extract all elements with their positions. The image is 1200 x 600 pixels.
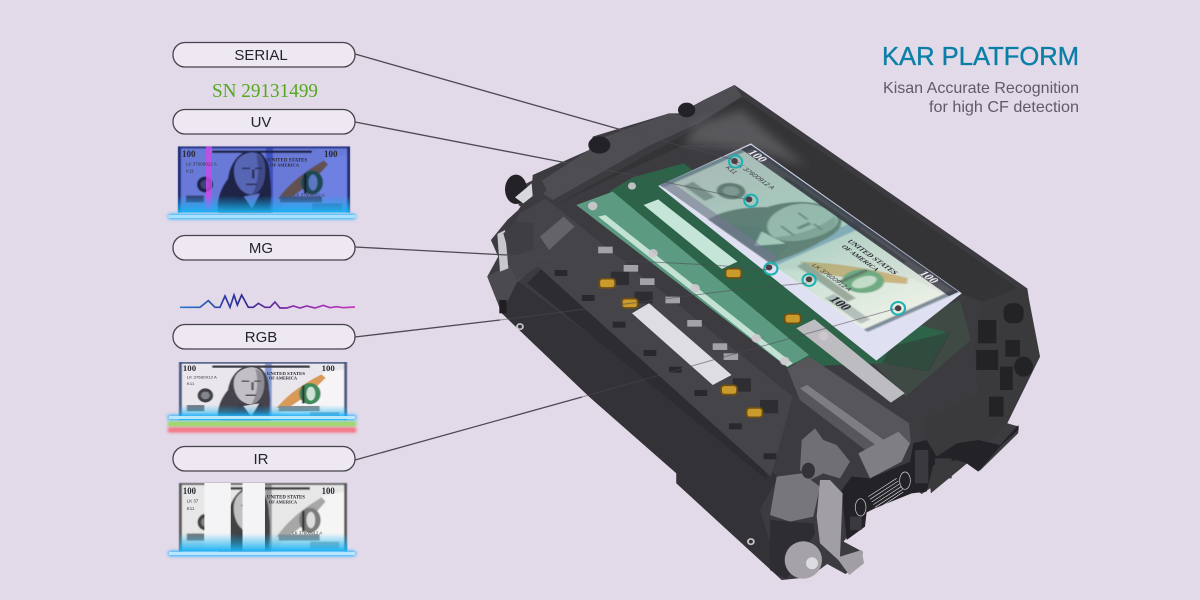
UV banknote: LK 37600912 A [294, 192, 325, 198]
label: RGB [173, 324, 355, 349]
chrome mounting hole marks [517, 242, 754, 544]
pcb lighter highlight strip [598, 215, 793, 367]
RGB banknote: 100 [322, 365, 335, 373]
RGB scan lines [168, 415, 356, 432]
tray grey band lower [787, 357, 911, 450]
row of sensor chips [598, 247, 738, 360]
knob middle [588, 136, 610, 154]
subtitle: Kisan Accurate Recognition [883, 80, 1079, 97]
green pcb translucent [576, 192, 809, 367]
leader line: MG [355, 247, 771, 270]
IR banknote: UNITED STATES [267, 495, 305, 501]
UV banknote: UNITED STATES [268, 158, 307, 164]
glass side band [800, 385, 891, 448]
translucent banknote: 100 [915, 269, 943, 285]
sensor rings [729, 156, 905, 315]
translucent banknote: UNITED STATES [845, 238, 900, 275]
translucent banknote: K11 [723, 166, 739, 175]
translucent banknote: 100 [825, 294, 856, 312]
label: UV [173, 110, 355, 134]
wall light haze [684, 110, 807, 167]
knob left [505, 175, 527, 204]
end housing [503, 222, 533, 257]
end bracket [497, 230, 508, 272]
serial number: SN 29131499 [212, 80, 318, 102]
right end detail [770, 425, 1018, 579]
pcb shaded far end [882, 332, 951, 372]
tab [515, 183, 533, 203]
knob right [678, 103, 695, 117]
leader line: UV [355, 122, 749, 200]
label: MG [173, 236, 355, 260]
IR scan line [168, 551, 356, 556]
IR banknote: 100 [183, 486, 197, 496]
label: SERIAL: SERIAL [234, 47, 288, 64]
IR banknote: 100 [322, 486, 335, 496]
green pcb dark [609, 163, 949, 370]
label: IR: IR [254, 451, 269, 468]
IR banknote: OF AMERICA [269, 499, 298, 505]
left detail: knobs and bracket [497, 103, 695, 313]
machine: KAR scanner module [487, 85, 1040, 580]
translucent deck highlight [540, 217, 575, 250]
leader line: IR [355, 308, 898, 460]
top deck [502, 198, 793, 477]
label: IR [173, 446, 355, 471]
back rim [533, 85, 742, 200]
UV banknote: K11 [186, 168, 194, 174]
frame openings [850, 450, 952, 530]
far inner wall [553, 97, 1018, 302]
dark end frame [842, 425, 1018, 540]
RGB banknote: LK 37600912 A [187, 375, 217, 380]
UV banknote [178, 146, 350, 212]
body silhouette [487, 85, 1040, 580]
bottom wheel [785, 541, 822, 579]
UV banknote: OF AMERICA [270, 162, 300, 168]
RGB banknote: OF AMERICA [269, 376, 297, 381]
white sensor panel lower left [632, 303, 732, 385]
IR banknote [179, 483, 347, 551]
UV scan line [168, 214, 356, 219]
leader line: RGB [355, 283, 807, 337]
translucent banknote [658, 143, 962, 361]
capacitor shadows [611, 272, 778, 413]
MG waveform [180, 295, 355, 308]
translucent end block [770, 473, 820, 522]
mint sensor panel [644, 199, 737, 269]
left end block [487, 255, 545, 313]
IR banknote: K11 [187, 506, 195, 511]
RGB banknote: K11 [187, 381, 195, 386]
UV banknote: 100 [324, 149, 338, 159]
RGB banknote: 100 [183, 365, 196, 373]
metal upper plate [800, 428, 850, 480]
IR banknote: LK 37600912 A [292, 530, 322, 536]
subtitle [883, 80, 1079, 116]
spring [855, 472, 910, 516]
RGB banknote: UNITED STATES [267, 372, 305, 377]
label: RGB: RGB [245, 329, 277, 346]
right rim [924, 288, 1040, 493]
plate hole [802, 463, 815, 479]
floor of cavity near far end [851, 300, 971, 397]
side hole [499, 300, 507, 313]
UV banknote: 100 [182, 149, 196, 159]
translucent banknote: LK 37600912 A [733, 161, 776, 191]
RGB banknote [179, 362, 347, 420]
translucent banknote: LK 37600912 A [809, 263, 853, 292]
metal bracket [817, 480, 864, 575]
circuit end board [858, 432, 910, 478]
subtitle: for high CF detection [929, 99, 1079, 116]
right end ribs [976, 303, 1033, 417]
grey sensor panel lower right [796, 319, 905, 403]
leader line: SERIAL [355, 54, 735, 160]
gold capacitors [599, 269, 801, 417]
translucent banknote: 100 [744, 148, 771, 164]
knob mount [518, 177, 547, 210]
dark tabs on deck [555, 270, 776, 459]
translucent banknote: OF AMERICA [839, 245, 881, 272]
title: KAR PLATFORM [882, 43, 1079, 71]
UV banknote: LK 37600912 A [186, 162, 217, 166]
label: UV: UV [251, 114, 271, 131]
screws [588, 182, 828, 365]
label: MG: MG [249, 240, 273, 257]
label: SERIAL [173, 42, 355, 67]
lower block [770, 520, 815, 579]
front lower side wall [502, 280, 782, 580]
front slot shadow [527, 268, 767, 480]
IR banknote: LK 37 [187, 498, 199, 504]
